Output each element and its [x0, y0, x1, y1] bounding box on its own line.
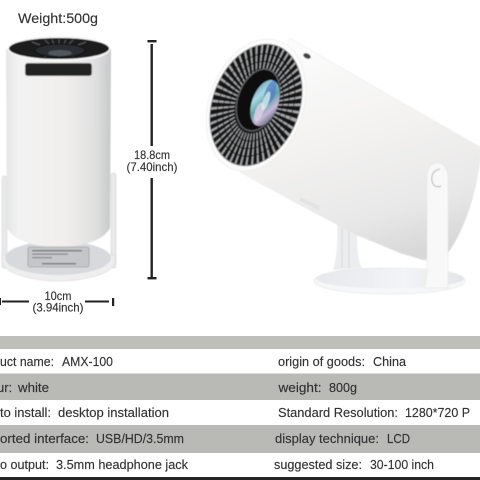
- projector body: [6, 49, 111, 247]
- row: interface and display: USB/HD/3.5mm: [96, 431, 184, 446]
- row: product name: origin of goods:: [278, 354, 365, 369]
- width text: (3.94inch): [32, 300, 84, 314]
- height dimension: [126, 40, 178, 279]
- power port: [302, 52, 312, 60]
- stand base: [2, 241, 115, 281]
- row: audio and size: o output:: [0, 457, 49, 472]
- row: install and resolution: Standard Resolution:: [278, 405, 398, 420]
- row: interface and display: LCD: [387, 431, 410, 446]
- lens glass: [245, 76, 285, 130]
- vent marks on body: [300, 198, 320, 209]
- row: audio and size: [0, 457, 434, 472]
- support arm: [424, 163, 448, 288]
- weight label: Weight:500g: [18, 10, 98, 26]
- row: colour and weight: white: [17, 380, 49, 395]
- row: interface and display: orted interface:: [0, 431, 89, 446]
- front rim: [189, 25, 323, 185]
- height text: 18.8cm: [134, 148, 170, 162]
- width text: 10cm: [44, 289, 72, 303]
- row: product name: China: [373, 354, 407, 369]
- width dimension: [0, 289, 114, 314]
- tilted projector: [189, 25, 480, 294]
- height text: [126, 148, 178, 174]
- height text: (7.40inch): [126, 160, 178, 174]
- upright projector: [2, 36, 116, 281]
- row: colour and weight: [0, 380, 357, 395]
- row: colour and weight: 800g: [329, 380, 357, 395]
- row: install and resolution: 1280*720 P: [405, 405, 470, 420]
- stand base: [314, 268, 465, 294]
- specification table: [0, 336, 480, 480]
- row: install and resolution: to install:: [0, 405, 51, 420]
- row: interface and display: [0, 431, 410, 446]
- row: colour and weight: weight:: [277, 380, 322, 395]
- speaker slot: [25, 63, 92, 76]
- row: product name: [0, 354, 407, 369]
- row: interface and display: display technique:: [275, 431, 379, 446]
- top vent: [8, 36, 110, 62]
- row: product name: uct name:: [0, 354, 54, 369]
- width text: [32, 289, 84, 314]
- row: install and resolution: [0, 405, 470, 420]
- cylinder body: [240, 38, 480, 260]
- radial grille: [194, 31, 318, 179]
- table bands: [0, 336, 480, 480]
- lens barrel: [228, 63, 288, 137]
- product label: [28, 247, 89, 267]
- stand neck: [333, 220, 362, 270]
- row: product name: AMX-100: [62, 354, 113, 369]
- stand arms: [2, 173, 116, 268]
- row: audio and size: suggested size:: [274, 457, 362, 472]
- row: audio and size: 3.5mm headphone jack: [56, 457, 188, 472]
- row: install and resolution: desktop installation: [58, 405, 169, 420]
- row: audio and size: 30-100 inch: [370, 457, 434, 472]
